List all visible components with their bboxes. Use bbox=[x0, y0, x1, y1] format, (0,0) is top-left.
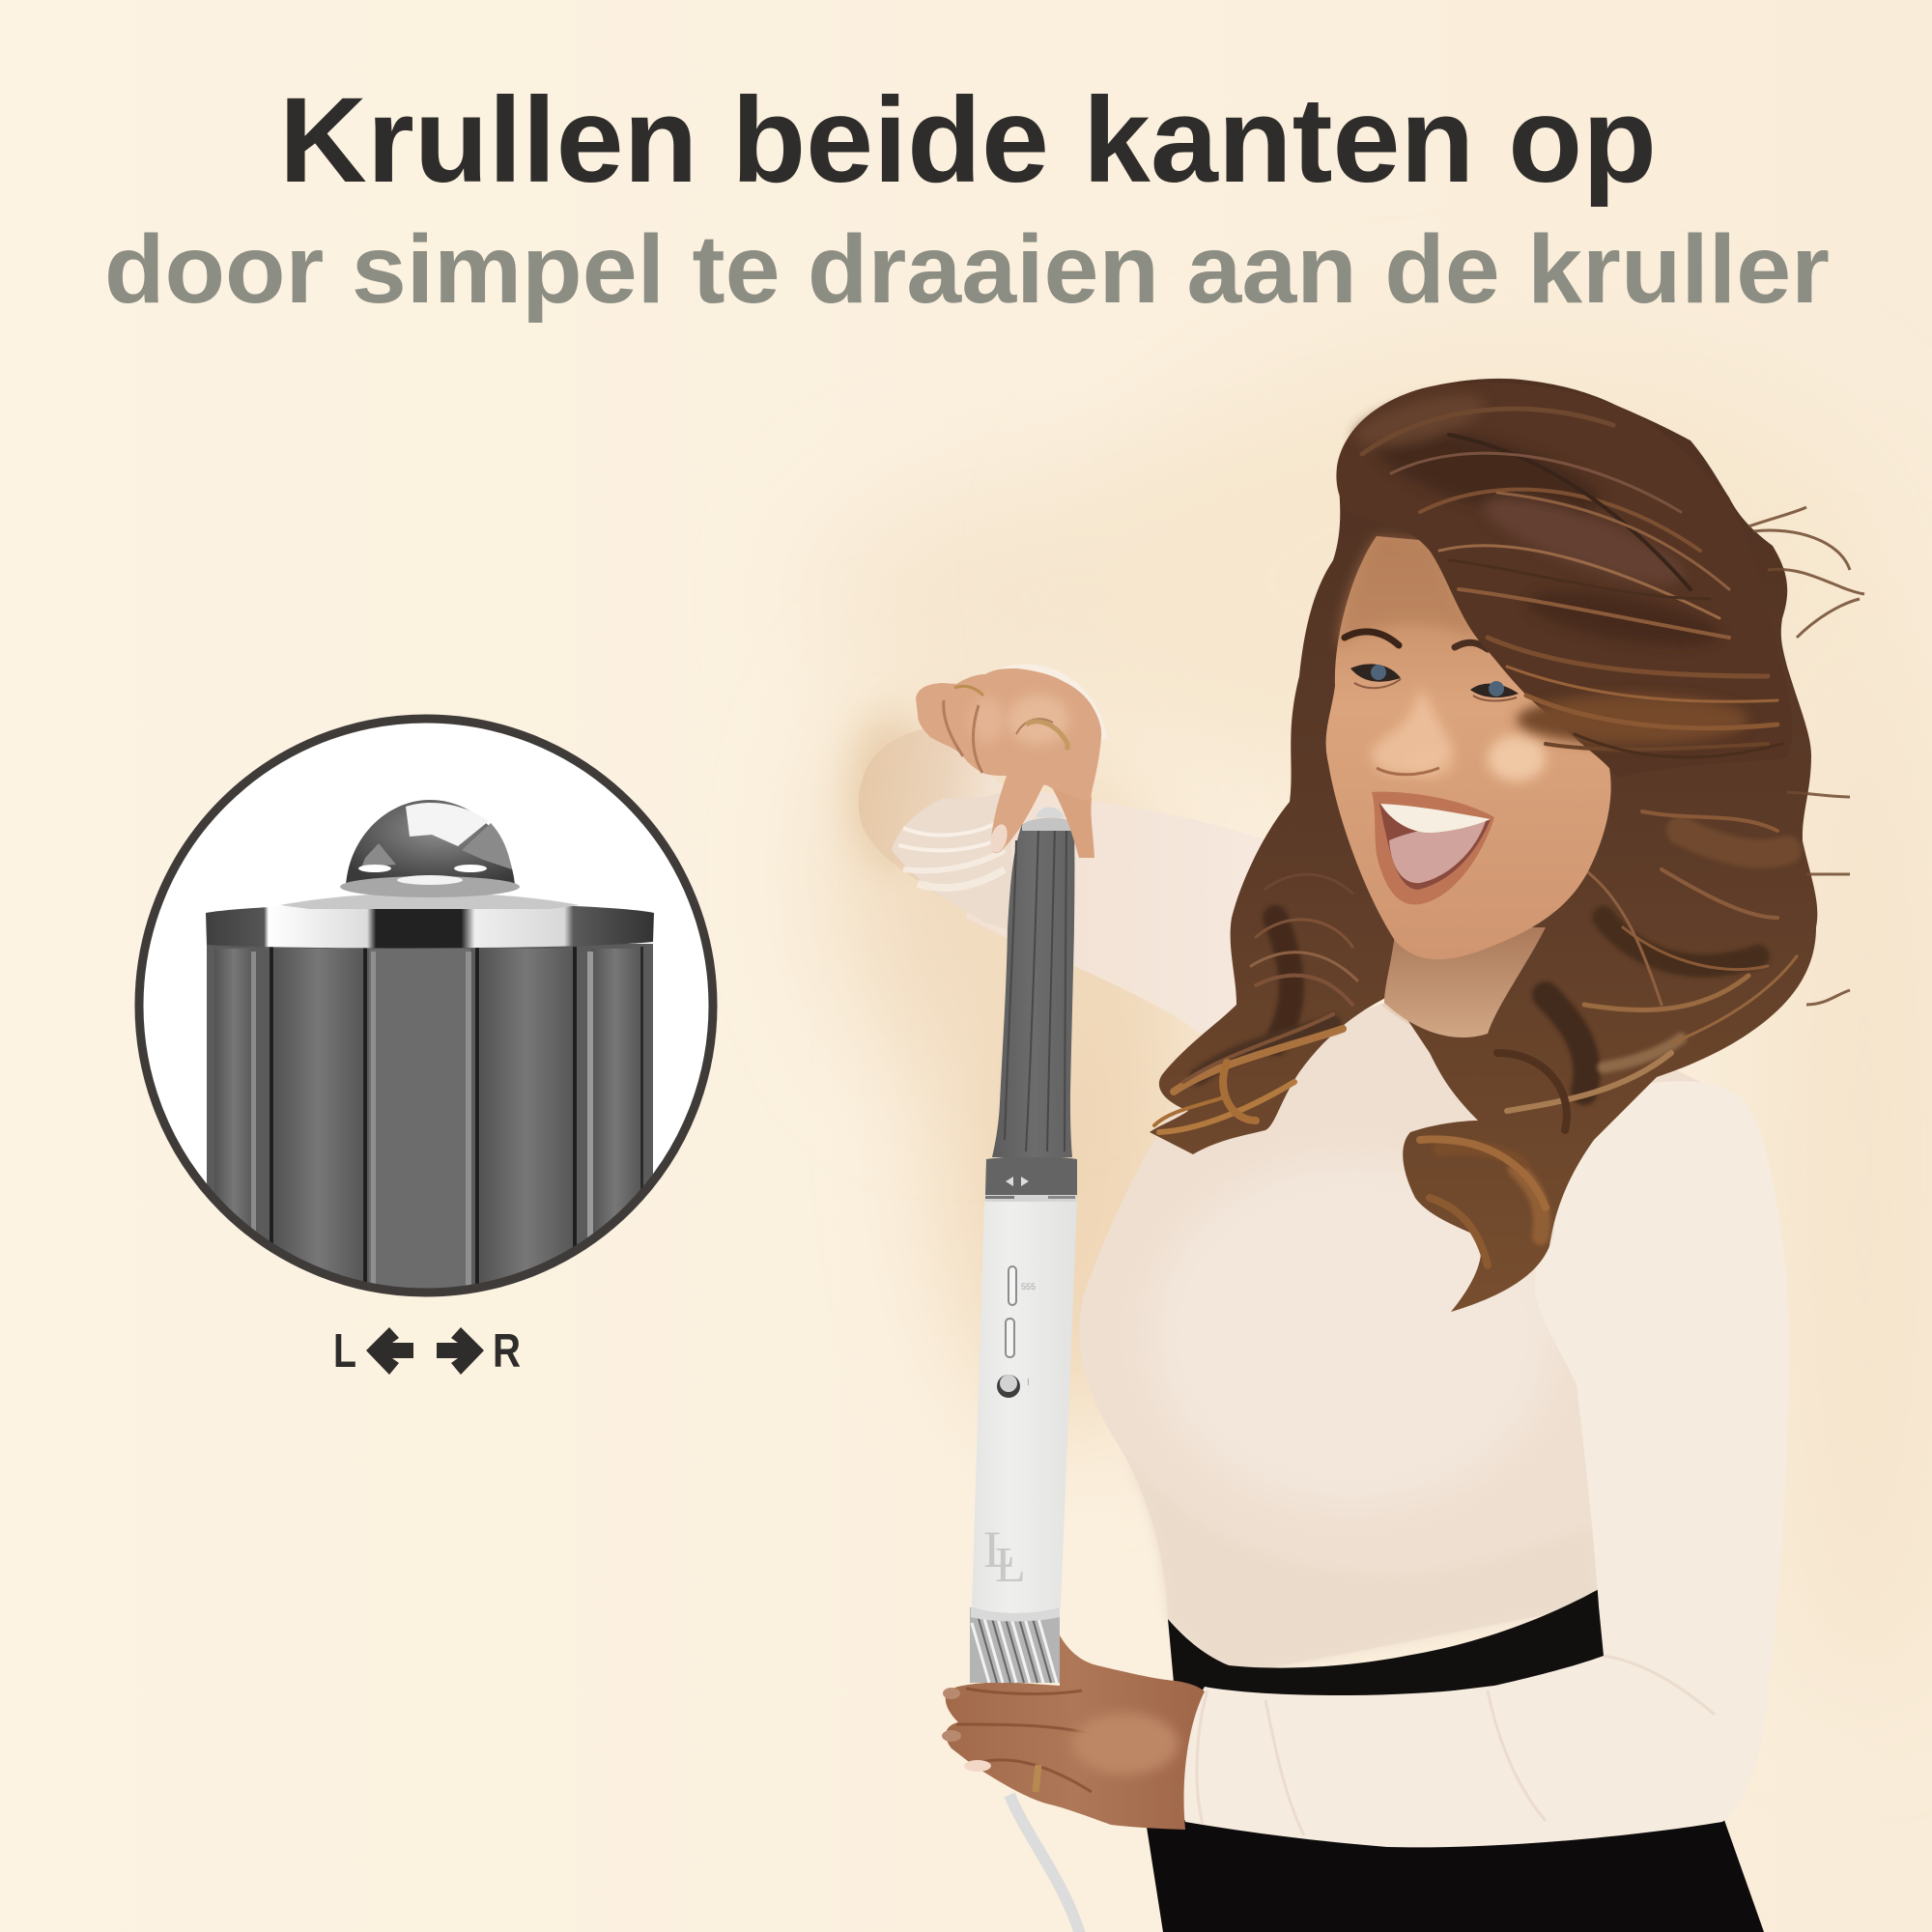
eye right bbox=[1470, 681, 1519, 701]
white handle bbox=[972, 1202, 1077, 1613]
knurled base bbox=[970, 1607, 1060, 1683]
collar arrows bbox=[1006, 1177, 1029, 1186]
logo LL: L bbox=[983, 1520, 1015, 1578]
hair highlights bbox=[1154, 811, 1797, 1265]
sleeve right bbox=[1181, 1081, 1789, 1847]
chrome cap bbox=[206, 903, 654, 948]
letter R: R bbox=[493, 1325, 521, 1378]
torso shirt bbox=[1079, 1003, 1700, 1676]
flyaway strands bbox=[1748, 507, 1864, 1005]
woman bbox=[859, 379, 1864, 1932]
lower hand bbox=[942, 1635, 1205, 1830]
slider button 1 bbox=[1009, 1266, 1016, 1305]
title: Krullen beide kanten op bbox=[279, 73, 1657, 208]
eye left bbox=[1350, 664, 1401, 688]
barrel bbox=[992, 824, 1074, 1157]
sleeve shading bbox=[1197, 1656, 1715, 1835]
hair back layer bbox=[1150, 379, 1817, 1312]
letter L: L bbox=[333, 1325, 356, 1378]
power marks: I bbox=[1027, 1378, 1030, 1388]
curling tool bbox=[970, 808, 1080, 1932]
chrome dome bbox=[340, 800, 520, 897]
magnified barrel bbox=[207, 944, 653, 1289]
heat label: 555 bbox=[1021, 1282, 1036, 1292]
back-of-hand finger bbox=[1053, 763, 1094, 858]
elbow in shadow bbox=[859, 729, 1014, 933]
hair tone waves bbox=[1198, 831, 1787, 1236]
trousers lower bbox=[1146, 1806, 1764, 1932]
waistband bbox=[1168, 1589, 1613, 1715]
control knob bbox=[997, 1375, 1020, 1398]
power cord bbox=[1009, 1795, 1080, 1932]
forehead shadow bbox=[1338, 536, 1478, 647]
panel: magnified curler top bbox=[139, 719, 713, 1333]
face bbox=[1326, 536, 1611, 959]
hair front sweep bbox=[1336, 383, 1792, 778]
chrome band bbox=[985, 1194, 1076, 1202]
ring bbox=[1036, 1765, 1038, 1792]
nail bbox=[987, 822, 1010, 855]
eyebrows bbox=[1345, 632, 1399, 645]
barrel tip bbox=[1022, 808, 1074, 831]
neck bbox=[1384, 927, 1546, 1037]
rotation direction label bbox=[333, 1325, 521, 1378]
subtitle: door simpel te draaien aan de kruller bbox=[104, 215, 1830, 324]
left arrow bbox=[366, 1327, 413, 1375]
logo LL: L bbox=[995, 1538, 1026, 1593]
fringe strands bbox=[1362, 409, 1782, 757]
collar bbox=[985, 1156, 1077, 1195]
mouth bbox=[1372, 792, 1494, 904]
raised arm bbox=[859, 729, 1294, 1072]
fringe tone patches bbox=[1350, 384, 1748, 745]
shirt cuff bbox=[1002, 668, 1104, 739]
rings bbox=[954, 686, 983, 696]
upper hand bbox=[916, 668, 1104, 858]
slider button 2 bbox=[1006, 1319, 1014, 1357]
cheek highlight bbox=[1488, 735, 1546, 781]
nose bbox=[1372, 686, 1454, 775]
right arrow bbox=[437, 1327, 484, 1375]
logo LL bbox=[983, 1520, 1026, 1593]
